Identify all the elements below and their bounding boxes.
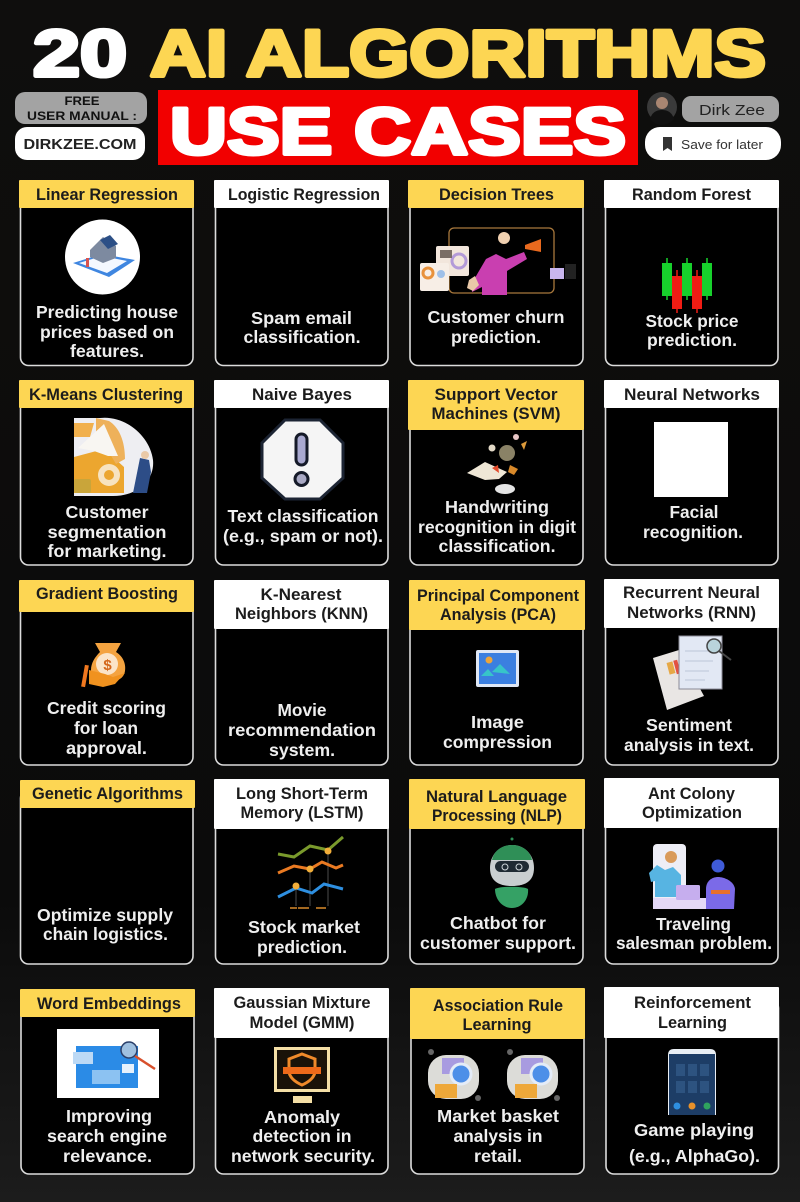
illustration: video call [649,844,735,909]
description: Predicting house [36,302,178,322]
description [643,502,743,542]
heading: Natural Language Processing (NLP): Natural Language [426,788,567,806]
description: Text classification [228,506,378,526]
description: relevance. [63,1146,152,1166]
pill: save for later [645,127,781,160]
illustration: handwriting and ideas [467,434,527,494]
title: 20 [33,16,127,90]
panel: Ant Colony Optimization [604,778,779,964]
description: salesman problem. [616,933,772,953]
description: segmentation [48,522,166,542]
icon: warning octagon [262,420,343,499]
description: Spam email [251,308,352,328]
heading: Ant Colony Optimization [642,785,742,822]
avatar [647,92,677,125]
pill: website: DIRKZEE.COM [24,137,136,153]
heading: Recurrent Neural Networks (RNN) [623,584,760,622]
heading: K-Nearest Neighbors (KNN): Neighbors (KNN) [235,605,368,623]
description: classification. [244,327,360,347]
description: Market basket [437,1106,559,1126]
panel: Neural Networks [604,380,779,565]
description: prediction. [257,937,347,957]
description: features. [70,341,144,361]
title: AI ALGORITHMS [150,16,766,90]
panel: Principal Component Analysis [409,580,585,765]
image placeholder: white square [654,422,728,497]
panel: K-Nearest Neighbors [214,580,389,765]
heading: Recurrent Neural Networks (RNN): Networks (RNN) [627,604,756,622]
panel: Naive Bayes [214,380,389,565]
pill: website [15,127,145,160]
pill: author name [682,96,779,122]
heading: Gaussian Mixture Model (GMM): Gaussian Mixture [234,994,370,1012]
description: recommendation [228,720,376,740]
heading: Reinforcement Learning [634,994,752,1032]
panel: Support Vector Machines [408,380,584,565]
description: Game playing [634,1120,754,1140]
pill: free user manual: FREE [64,96,100,108]
heading: Word Embeddings: Word Embeddings [37,995,181,1013]
panel: Genetic Algorithms [20,780,195,964]
description [47,698,166,758]
description: customer support. [420,933,576,953]
banner: use cases: USE CASES [170,94,626,168]
pill: free user manual [15,92,147,124]
pill: free user manual: USER MANUAL : [27,111,137,123]
description: search engine [47,1126,167,1146]
description: Chatbot for [450,913,546,933]
description [48,502,166,561]
description: system. [269,740,335,760]
heading: Long Short-Term Memory (LSTM): Long Short-Term [236,785,368,803]
heading: K-Means Clustering: K-Means Clustering [29,386,183,404]
panel: Gradient Boosting [19,580,194,765]
description: Optimize supply [37,905,173,925]
pill: save for later: Save for later [681,138,763,152]
icon: money bag in hand [81,643,125,687]
heading: Principal Component Analysis (PCA): Analysis (PCA) [440,606,556,624]
description [616,914,772,953]
description: Traveling [656,914,731,934]
heading: Naive Bayes: Naive Bayes [252,386,352,404]
icon: security monitor [276,1048,328,1103]
heading: K-Nearest Neighbors (KNN) [235,586,368,623]
description [443,712,552,752]
icon: picture [476,650,519,687]
description: for marketing. [48,541,166,561]
illustration: search on dashboard [57,1029,159,1098]
description: retail. [474,1146,522,1166]
panel: Linear Regression [19,180,194,366]
description: Credit scoring [47,698,166,718]
icon: house on blueprint [65,220,140,294]
description [228,700,376,760]
panel: Long Short-Term Memory [214,779,389,964]
heading: Reinforcement Learning: Learning [658,1014,727,1032]
description: recognition. [643,522,743,542]
heading: Support Vector Machines (SVM): Machines (SVM) [432,405,560,423]
heading: K-Nearest Neighbors (KNN): K-Nearest [260,586,342,604]
description [47,1106,167,1166]
pill: author name: Dirk Zee [699,102,765,119]
heading: Genetic Algorithms: Genetic Algorithms [32,785,183,803]
icon: chatbot robot [490,838,534,908]
description: Movie [278,700,327,720]
description: network security. [231,1146,375,1166]
description: analysis in text. [624,735,754,755]
description: Improving [66,1106,152,1126]
description [231,1107,375,1166]
heading: Logistic Regression: Logistic Regression [228,186,380,204]
panel: K-Means Clustering [19,380,194,565]
description: analysis in [454,1126,542,1146]
description: Anomaly [264,1107,340,1127]
description: prediction. [451,327,541,347]
description: Stock price [646,311,739,331]
description: (e.g., spam or not). [223,526,383,546]
illustration: basket analysis, left [428,1049,481,1101]
heading: Association Rule Learning: Learning [462,1016,532,1034]
heading: Linear Regression: Linear Regression [36,186,178,204]
description [37,905,173,944]
heading: Association Rule Learning: Association Rule [433,997,563,1015]
description: classification. [438,536,556,556]
heading: Natural Language Processing (NLP) [426,788,567,825]
description: chain logistics. [43,924,168,944]
panel: Gaussian Mixture Model [214,988,389,1174]
description [223,506,383,546]
description [437,1106,559,1166]
heading: Random Forest: Random Forest [632,186,751,204]
description: detection in [252,1126,352,1146]
heading: Decision Trees: Decision Trees [439,186,554,204]
panel: Word Embeddings [20,989,195,1174]
heading: Neural Networks: Neural Networks [624,386,760,404]
description [248,917,360,957]
heading: Principal Component Analysis (PCA) [417,587,579,624]
description: for loan [74,718,138,738]
description [36,302,178,361]
heading: Long Short-Term Memory (LSTM): Memory (LSTM) [240,804,364,822]
illustration: basket analysis, right [507,1049,560,1101]
panel: Natural Language Processing [409,779,585,964]
panel: Logistic Regression [214,180,389,366]
description: prices based on [40,322,174,342]
description: Image [471,712,524,732]
heading: Ant Colony Optimization: Optimization [642,804,742,822]
heading: Reinforcement Learning: Reinforcement [634,994,752,1012]
description: recognition in digit [418,517,576,537]
heading: Association Rule Learning [433,997,563,1034]
description: (e.g., AlphaGo). [629,1146,760,1166]
panel: Random Forest [604,180,779,366]
description: Stock market [248,917,360,937]
illustration: presenter with megaphone [420,228,576,295]
heading: Gaussian Mixture Model (GMM) [234,994,370,1032]
icon: money bag in hand: $ [103,657,112,674]
panel: Recurrent Neural Networks [604,579,779,765]
line chart: three series [278,837,343,908]
heading: Recurrent Neural Networks (RNN): Recurrent Neural [623,584,760,602]
panel: Decision Trees [408,180,584,366]
heading: Gradient Boosting: Gradient Boosting [36,585,178,603]
description [420,913,576,953]
description [428,307,564,347]
description: compression [443,732,552,752]
heading: Principal Component Analysis (PCA): Principal Component [417,587,579,605]
description: Facial [670,502,718,522]
heading: Ant Colony Optimization: Ant Colony [648,785,736,803]
heading: Long Short-Term Memory (LSTM) [236,785,368,822]
description: Sentiment [646,715,732,735]
description: Handwriting [445,497,549,517]
illustration: marketing megaphone [74,418,153,496]
description: prediction. [647,330,737,350]
description: Customer [66,502,149,522]
illustration: documents and magnifier [653,636,731,710]
panel: Reinforcement Learning [604,987,779,1174]
heading: Natural Language Processing (NLP): Processing (NLP) [432,807,562,825]
icon: smartphone [668,1049,716,1115]
description: approval. [66,738,147,758]
heading: Support Vector Machines (SVM) [432,386,560,423]
description [629,1120,760,1166]
description [624,715,754,755]
panel: Association Rule Learning [410,988,585,1174]
description: Customer churn [428,307,564,327]
icon: candlestick chart [662,258,712,313]
heading: Support Vector Machines (SVM): Support Vector [434,386,558,404]
description [244,308,360,347]
description [646,311,739,350]
heading: Gaussian Mixture Model (GMM): Model (GMM) [250,1014,354,1032]
description [418,497,576,556]
